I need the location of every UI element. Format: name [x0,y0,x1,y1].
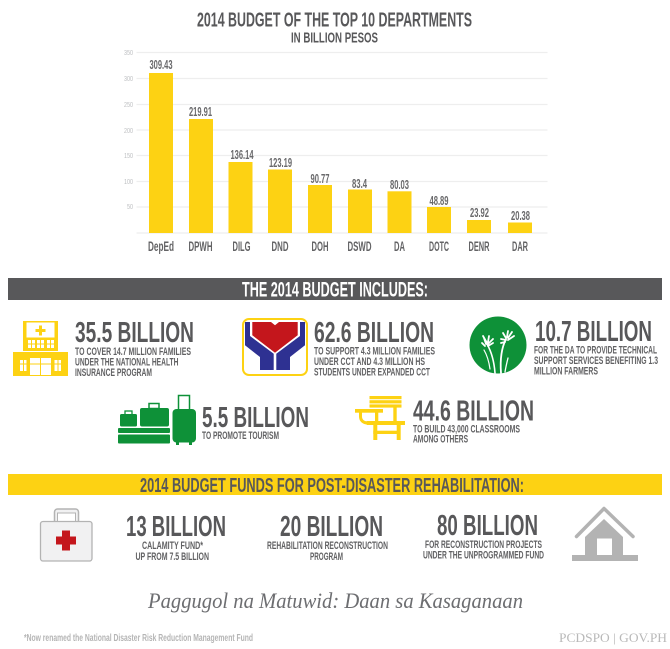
stat: 62.6 billion: 62.6 BILLION [314,317,434,349]
bar values: 80.03 [390,178,409,192]
stat: 44.6 billion [413,396,534,446]
y axis labels: 200 [124,128,133,135]
stat: 35.5 billion: 35.5 BILLION [75,317,194,349]
y axis labels: 350 [124,50,133,57]
y axis labels: 150 [124,153,133,160]
category labels: DSWD [348,239,372,254]
category labels: DepEd [148,239,174,254]
bar values: 20.38 [511,209,530,223]
tagline: Paggugol na Matuwid: Daan sa Kasaganaan [147,588,523,613]
stat: 80 billion: UNDER THE UNPROGRAMMED FUND [423,550,544,562]
stat: 44.6 billion: 44.6 BILLION [413,396,534,428]
bar values [150,58,530,223]
section banner: the 2014 budget includes: THE 2014 BUDGET INCLUDES: [242,278,428,302]
stat: 80 billion [423,510,544,562]
subtitle: IN BILLION PESOS [291,30,378,46]
bar values: 136.14 [230,148,254,162]
category labels: DILG [232,239,250,254]
stat: 35.5 billion: TO COVER 14.7 MILLION FAMILIES [75,346,191,358]
section banner: the 2014 budget includes [8,278,662,302]
stat: 10.7 billion: MILLION FARMERS [534,366,598,378]
category labels: DOH [312,239,328,254]
stat: 62.6 billion: UNDER CCT AND 4.3 MILLION HS [314,356,425,368]
stat: 20 billion [267,511,388,563]
category labels: DAR [512,239,528,254]
stat: 13 billion: UP FROM 7.5 BILLION [136,551,209,563]
bars [149,73,532,233]
bar values: 309.43 [150,58,173,72]
stat: 20 billion: PROGRAM [310,551,343,563]
icon: school desk [355,396,405,440]
bar values: 23.92 [470,206,489,220]
category labels: DA [394,239,405,254]
stat: 20 billion: 20 BILLION [280,511,383,543]
stat: 35.5 billion: INSURANCE PROGRAM [75,367,152,379]
category labels [148,239,528,254]
bar values: 123.19 [269,156,292,170]
stat: 13 billion [126,511,226,563]
stat: 5.5 billion: TO PROMOTE TOURISM [202,430,279,442]
bar values: 219.91 [189,105,212,119]
stat: 62.6 billion [314,317,435,378]
y axis labels: 50 [127,204,133,211]
stat: 44.6 billion: AMONG OTHERS [413,434,468,446]
icon: luggage [118,396,196,445]
credit: PCDSPO: PCDSPO | GOV.PH [559,630,667,645]
category labels: DOTC [429,239,449,254]
icon: first aid kit [40,509,92,561]
stat: 44.6 billion: TO BUILD 43,000 CLASSROOMS [413,424,520,436]
category labels: DPWH [188,239,212,254]
stat: 10.7 billion [534,316,658,378]
footnote: *Now renamed the National Disaster Risk Reduction Management Fund [24,633,253,644]
title: 2014 BUDGET OF THE TOP 10 DEPARTMENTS [197,10,472,32]
bar values: 90.77 [310,172,330,186]
category labels: DND [272,239,289,254]
icon: DSWD hands and heart [243,319,307,375]
stat: 13 billion: 13 BILLION [126,511,226,543]
stat: 62.6 billion: STUDENTS UNDER EXPANDED CCT [314,366,430,378]
stat: 35.5 billion [75,317,194,379]
y axis labels: 250 [124,102,133,109]
category labels: DENR [468,239,490,254]
icon: house [572,508,638,561]
y axis labels: 300 [124,76,133,83]
stat: 80 billion: FOR RECONSTRUCTION PROJECTS [425,539,542,551]
y axis labels [124,50,133,211]
stat: 80 billion: 80 BILLION [437,510,538,542]
icon: hospital [13,321,68,376]
icon: rice in green circle [470,316,526,374]
stat: 20 billion: REHABILITATION RECONSTRUCTION [267,540,388,552]
bar values: 48.89 [430,194,449,208]
bar values: 83.4 [352,177,367,191]
stat: 62.6 billion: TO SUPPORT 4.3 MILLION FAMILIES [314,346,435,358]
stat: 13 billion: CALAMITY FUND* [142,540,203,552]
bar chart [124,50,548,254]
stat: 5.5 billion [202,402,309,442]
stat: 35.5 billion: UNDER THE NATIONAL HEALTH [75,356,179,368]
y axis labels: 100 [124,179,133,186]
stat: 5.5 billion: 5.5 BILLION [202,402,309,434]
